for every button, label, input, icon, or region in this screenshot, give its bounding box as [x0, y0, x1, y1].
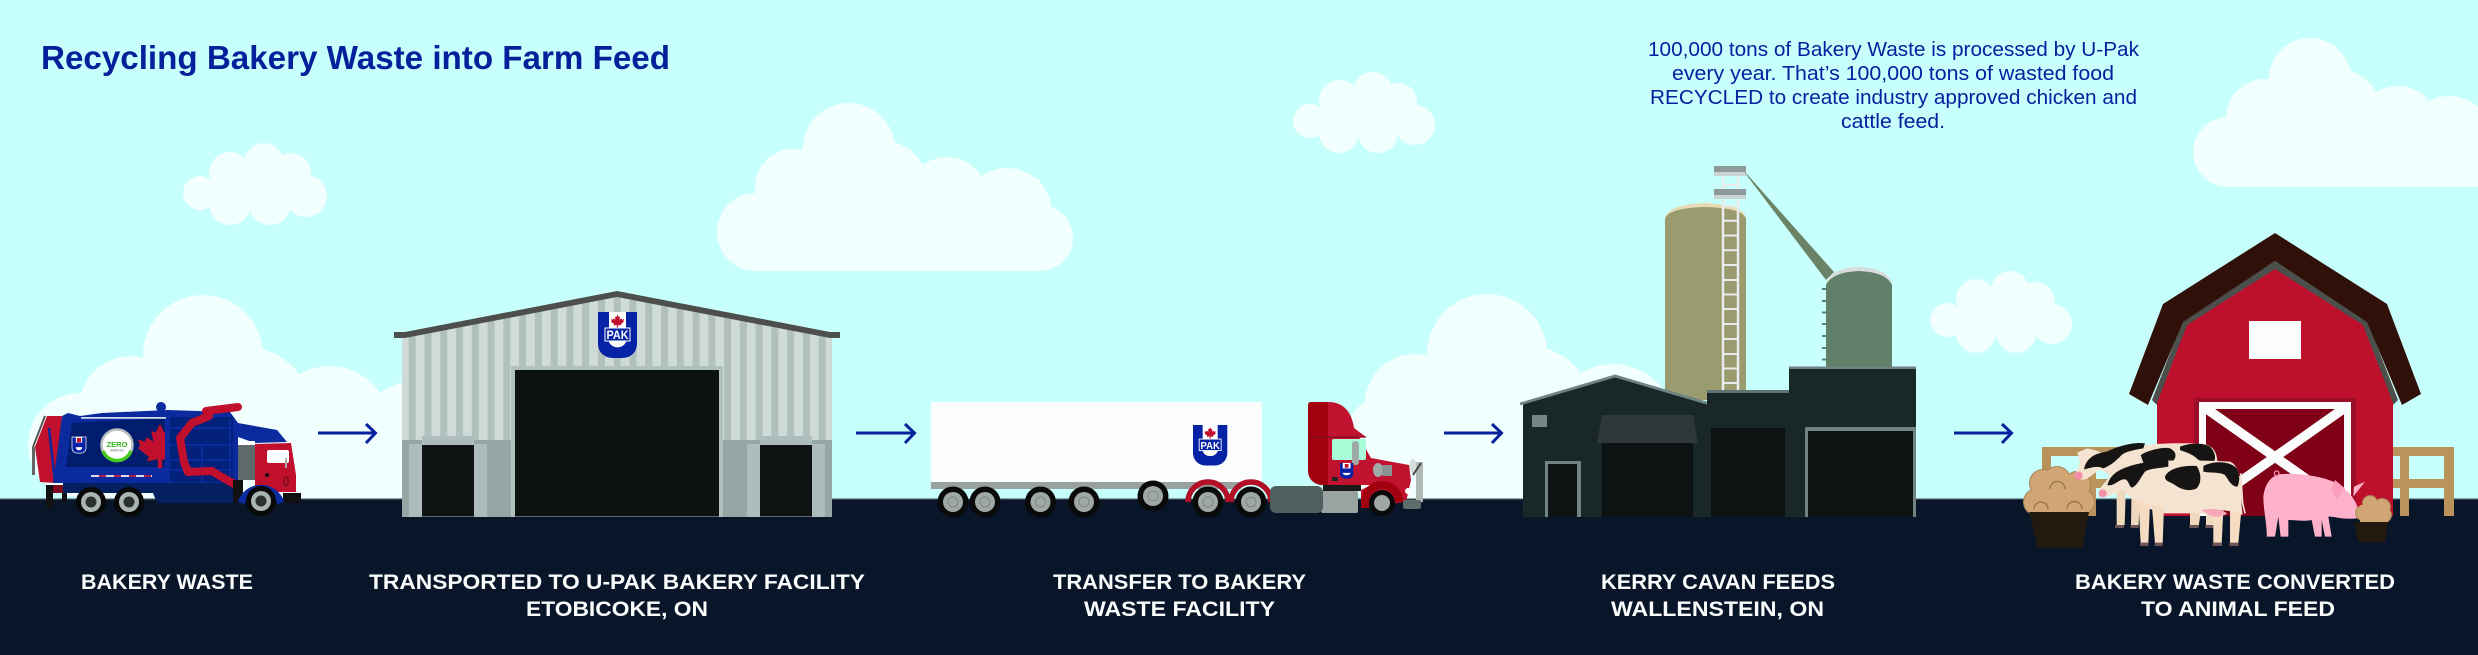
cloud: upper centre	[1293, 72, 1435, 153]
label: kerry cavan	[1601, 570, 1835, 621]
cloud: large centre	[717, 103, 1073, 271]
cloud: behind garbage truck	[28, 295, 490, 520]
side stripe	[91, 475, 152, 477]
label: transfer	[1053, 570, 1306, 621]
platforms	[1714, 166, 1746, 199]
blue fender	[241, 488, 281, 503]
maple leaf graphic	[138, 424, 165, 468]
back cow	[2075, 443, 2218, 528]
trailer wheels	[938, 480, 1266, 518]
headlight	[1405, 488, 1411, 494]
arrow 3	[1444, 424, 1502, 443]
cab	[255, 443, 296, 492]
info text block: cattle feed.	[1841, 111, 1945, 133]
fuel tanks	[1270, 486, 1358, 513]
red lift arm	[180, 407, 238, 486]
trailer	[931, 402, 1262, 482]
cab gap	[233, 441, 255, 503]
barn window	[2249, 321, 2301, 359]
side panel	[66, 418, 165, 467]
grille and bumper	[1403, 459, 1423, 509]
fence	[2042, 447, 2454, 516]
right building	[1789, 366, 1916, 517]
tail gate	[32, 416, 62, 483]
barn roof	[2129, 233, 2421, 405]
zero waste badge: ZERO	[107, 440, 128, 449]
label: transfer: WASTE FACILITY	[1084, 597, 1275, 621]
left building	[1520, 376, 1710, 517]
barn door	[2194, 398, 2356, 516]
icon: u-pak logo: PAK	[606, 328, 629, 342]
panel: kerry cavan feed mill	[1520, 166, 1916, 517]
icon: trailer logo: PAK	[1200, 440, 1220, 452]
door surround	[511, 366, 723, 517]
panel: barn and animals	[2023, 233, 2454, 548]
wheel	[76, 487, 106, 517]
roof highlight	[81, 417, 166, 419]
title: Recycling Bakery Waste into Farm Feed	[41, 39, 670, 76]
bumper	[283, 493, 301, 503]
hopper grid	[170, 417, 233, 482]
info text block: every year. That’s 100,000 tons of wasted food	[1672, 63, 2114, 85]
arrow 1	[318, 424, 376, 443]
front wheel	[1369, 490, 1395, 516]
label: animal feed	[2075, 570, 2395, 621]
info text block: RECYCLED to create industry approved chicken and	[1650, 87, 2137, 109]
label: animal feed: BAKERY WASTE CONVERTED	[2075, 570, 2395, 594]
label: transported: ETOBICOKE, ON	[526, 597, 708, 621]
roof	[394, 291, 840, 338]
ladder	[1723, 175, 1738, 390]
cloud: near barn	[1930, 271, 2072, 353]
cloud: behind kerry cavan	[1340, 294, 1675, 510]
cab logo	[1340, 463, 1353, 479]
ball	[156, 402, 166, 412]
panel: garbage truck	[32, 402, 301, 517]
barn wall	[2157, 269, 2393, 516]
feed bowl right	[2354, 495, 2392, 542]
label: bakery waste: BAKERY WASTE	[81, 570, 253, 594]
tan silo	[1665, 203, 1746, 400]
label: kerry cavan: WALLENSTEIN, ON	[1611, 597, 1824, 621]
left bay	[402, 436, 511, 517]
label: animal feed: TO ANIMAL FEED	[2141, 597, 2335, 621]
cow and pig group	[2075, 443, 2365, 546]
arrow 4	[1954, 424, 2012, 443]
panel: semi truck	[931, 402, 1423, 518]
conveyor	[1745, 172, 1834, 280]
truck logo	[72, 437, 86, 453]
right bay	[723, 436, 832, 517]
trailer rail	[931, 482, 1241, 489]
cab	[1308, 402, 1411, 507]
rear stand	[46, 485, 67, 508]
zero waste badge: WASTE	[110, 448, 124, 452]
label: transported: TRANSPORTED TO U-PAK BAKERY FACILITY	[369, 570, 865, 594]
label: kerry cavan: KERRY CAVAN FEEDS	[1601, 570, 1835, 594]
panel: warehouse	[394, 291, 840, 517]
icon: u-pak logo	[598, 312, 637, 358]
cloud: top right	[2193, 38, 2478, 187]
middle building	[1707, 390, 1789, 517]
front cow	[2099, 460, 2245, 546]
barn roof trim	[2152, 261, 2398, 410]
info text block	[1648, 39, 2140, 133]
label: transported	[369, 570, 865, 621]
wall	[402, 297, 832, 517]
info text block: 100,000 tons of Bakery Waste is processed by U-Pak	[1648, 39, 2140, 61]
label: transfer: TRANSFER TO BAKERY	[1053, 570, 1306, 594]
feed bowl left	[2023, 466, 2095, 548]
front fender	[1365, 485, 1399, 508]
wheel	[114, 487, 144, 517]
truck body	[53, 410, 287, 483]
green silo	[1822, 267, 1892, 367]
icon: trailer logo	[1193, 425, 1227, 465]
arrow 2	[856, 424, 914, 443]
main door	[515, 370, 719, 516]
hood vent	[1373, 463, 1392, 477]
pig	[2263, 471, 2365, 537]
lower chassis	[63, 483, 233, 503]
ground	[0, 498, 2478, 655]
zero waste badge	[102, 430, 132, 461]
wheel	[246, 486, 276, 516]
cloud: small left	[183, 143, 327, 225]
red mud guards	[1188, 482, 1271, 502]
